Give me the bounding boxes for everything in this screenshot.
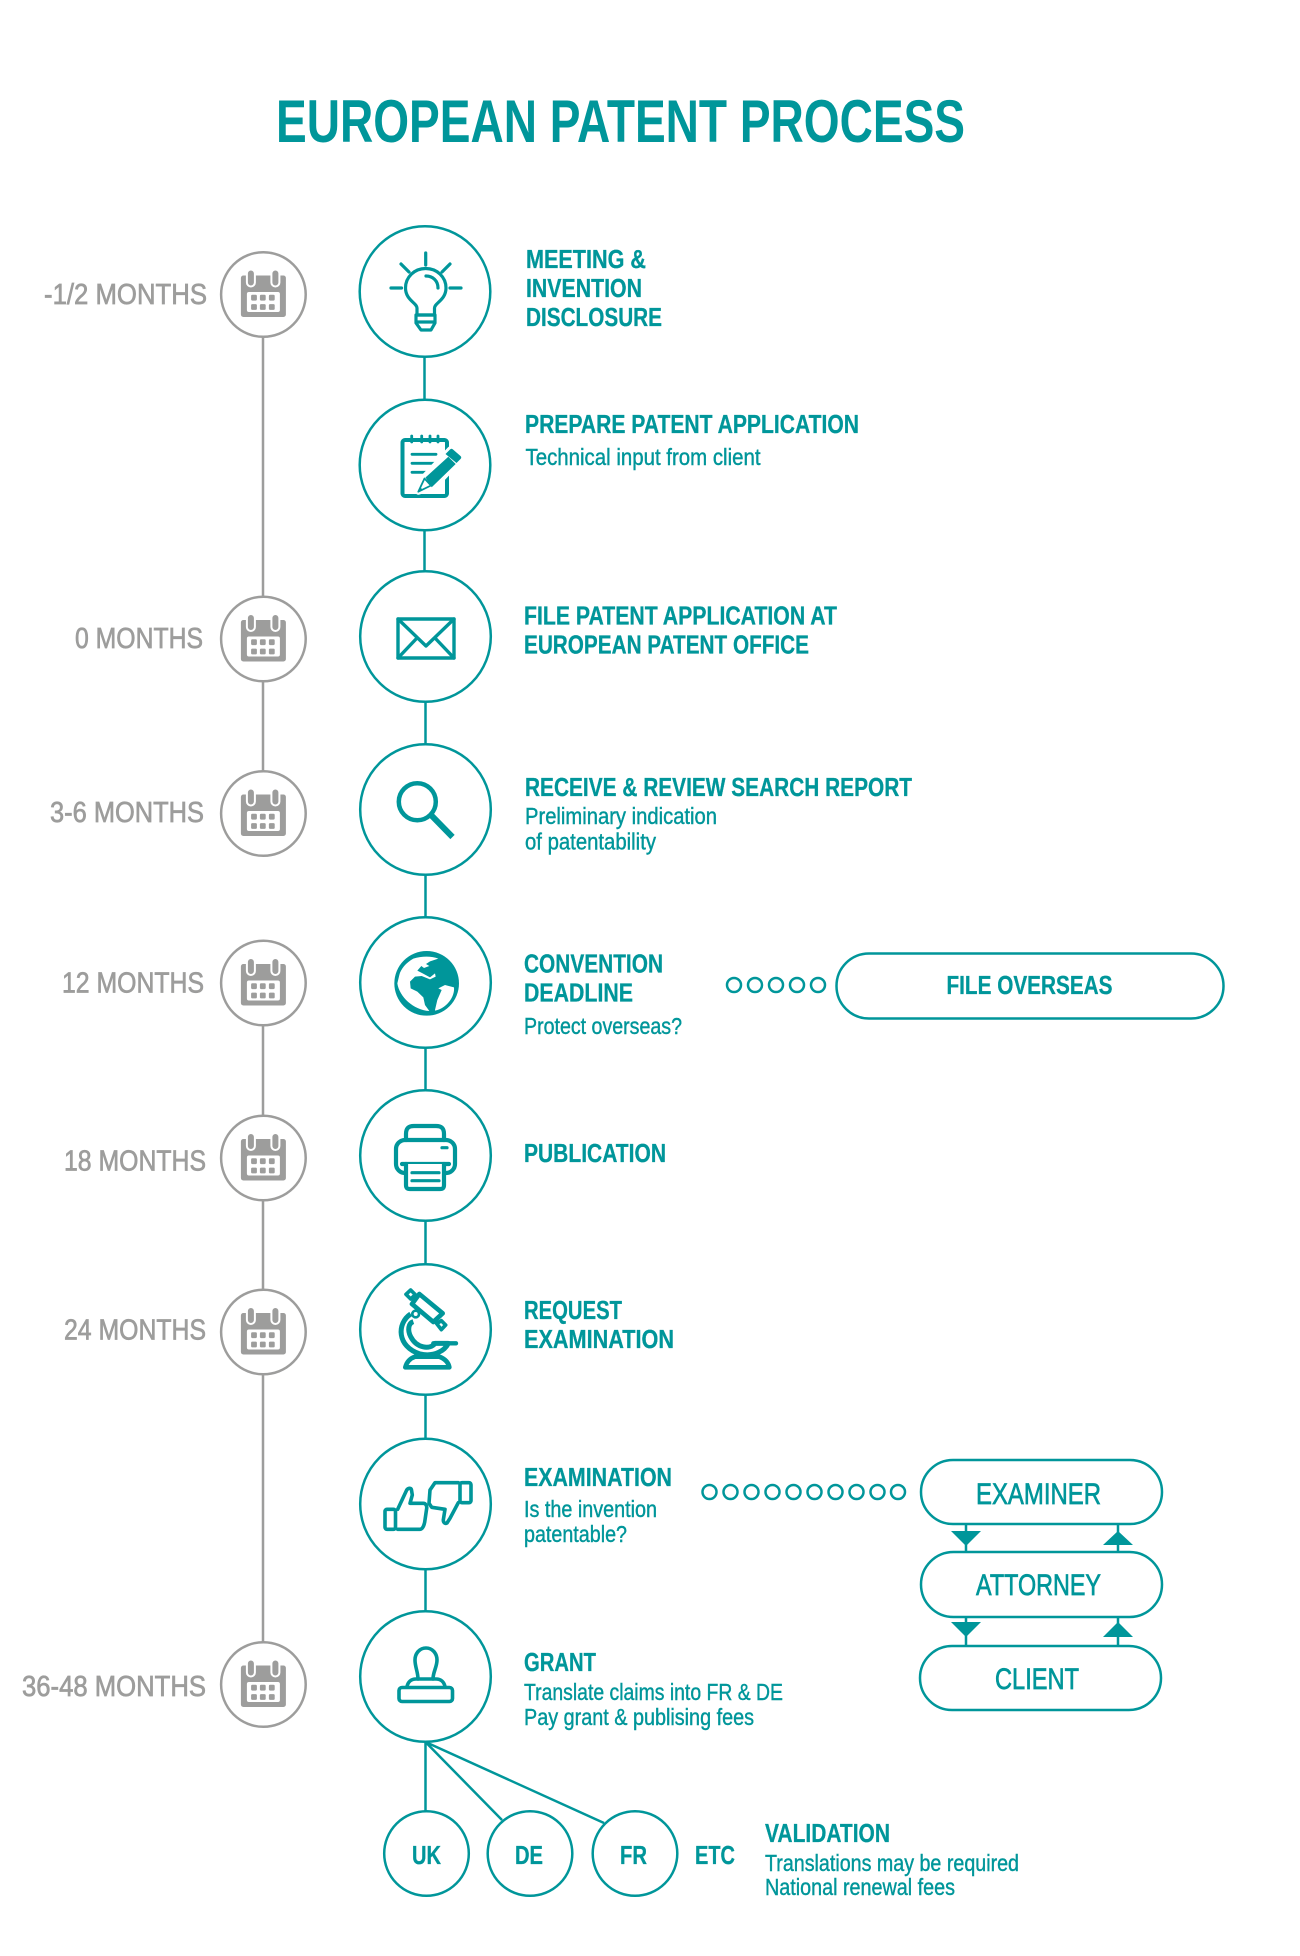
timeline marker: 24 months: 24 MONTHS [64,1314,206,1346]
timeline marker: 12 months [62,941,306,1025]
timeline marker: 18 months [64,1116,306,1200]
country: FR: FR [620,1840,647,1870]
timeline marker: 36-48 months: 36-48 MONTHS [22,1671,206,1703]
text: heading and note: CONVENTION [524,948,663,978]
step: file patent application [360,571,837,702]
text: heading and note: Protect overseas? [524,1013,682,1039]
text: heading [524,600,837,660]
icon: stamp [399,1648,452,1702]
text: heading and note: DEADLINE [524,978,633,1008]
correspondence arrows [951,1524,1133,1646]
country: UK [384,1811,469,1896]
text: heading [524,1295,674,1354]
icon: light bulb [391,253,461,330]
step: convention deadline [360,917,682,1048]
icon: globe [394,951,459,1016]
step: publication [360,1090,666,1221]
icon: printer [396,1126,455,1189]
timeline marker: 36-48 months [22,1642,306,1727]
text: heading: MEETING & [526,244,646,274]
dotted link to file overseas [727,978,825,992]
text: validation: VALIDATION [765,1818,890,1848]
icon: thumbs up and down [385,1483,471,1529]
text: heading and note: Is the invention [524,1496,657,1522]
dotted link to examiner [702,1485,905,1499]
pill: examiner: EXAMINER [976,1478,1101,1511]
country: UK: UK [412,1840,441,1870]
country: DE [488,1811,572,1896]
pill: attorney: ATTORNEY [976,1569,1101,1602]
text: heading: EXAMINATION [524,1324,674,1354]
text: heading and note: patentable? [524,1521,627,1547]
pill: client [920,1646,1161,1710]
timeline marker: -1/2 months: -1/2 MONTHS [44,279,207,311]
text: heading: PUBLICATION [524,1138,666,1168]
pill: examiner [921,1460,1162,1524]
text: heading and note: of patentability [525,828,656,854]
timeline marker: 3-6 months [50,771,306,856]
step: request examination [360,1264,674,1395]
timeline marker: 0 months [75,597,306,681]
pill: file overseas [836,954,1224,1018]
timeline marker: 24 months [64,1290,306,1374]
text: heading and note: PREPARE PATENT APPLICATION [525,409,859,439]
text: validation: Translations may be required [765,1850,1019,1876]
icon: envelope [398,619,454,658]
text: heading and note [525,772,912,854]
text: heading and note [524,948,682,1039]
timeline marker: 12 months: 12 MONTHS [62,968,204,1000]
text: heading: FILE PATENT APPLICATION AT [524,600,837,630]
icon: magnifying glass [399,783,452,837]
step: meeting and invention disclosure [360,226,662,357]
pill: file overseas: FILE OVERSEAS [946,970,1112,1000]
text: heading and note: GRANT [524,1647,596,1677]
text: validation [765,1818,1019,1900]
text: heading: INVENTION [526,273,642,303]
timeline marker: -1/2 months [44,252,306,337]
pill: client: CLIENT [995,1663,1079,1696]
grey timeline line [262,337,264,1643]
country: DE: DE [515,1840,543,1870]
step: examination [360,1439,672,1569]
teal process connector [424,357,426,1611]
text: validation: National renewal fees [765,1874,955,1900]
timeline marker: 0 months: 0 MONTHS [75,623,203,655]
text: heading [526,244,662,332]
country: FR [593,1811,677,1896]
step: grant [360,1611,783,1742]
text: heading and note: Translate claims into FR & DE [524,1679,783,1705]
text: heading and note: EXAMINATION [524,1462,672,1492]
text: heading: EUROPEAN PATENT OFFICE [524,630,809,660]
timeline marker: 18 months: 18 MONTHS [64,1146,206,1178]
step: receive and review search report [360,744,912,875]
text: heading and note [525,409,859,470]
title: EUROPEAN PATENT PROCESS [276,88,965,155]
text: heading: DISCLOSURE [526,302,662,332]
text: heading and note: Pay grant & publising fees [524,1704,754,1730]
text: heading: REQUEST [524,1295,622,1325]
validation fan lines [426,1742,604,1823]
icon: microscope [401,1290,456,1367]
text: heading and note: Technical input from client [526,444,761,470]
label: etc: ETC [695,1840,735,1870]
text: heading and note: Preliminary indication [525,803,717,829]
pill: attorney [921,1552,1162,1617]
text: heading and note [524,1647,783,1730]
text: heading and note: RECEIVE & REVIEW SEARCH REPORT [525,772,912,802]
timeline marker: 3-6 months: 3-6 MONTHS [50,797,204,829]
text: heading and note [524,1462,672,1547]
icon: notepad and pencil [402,436,461,496]
step: prepare patent application [360,400,859,530]
